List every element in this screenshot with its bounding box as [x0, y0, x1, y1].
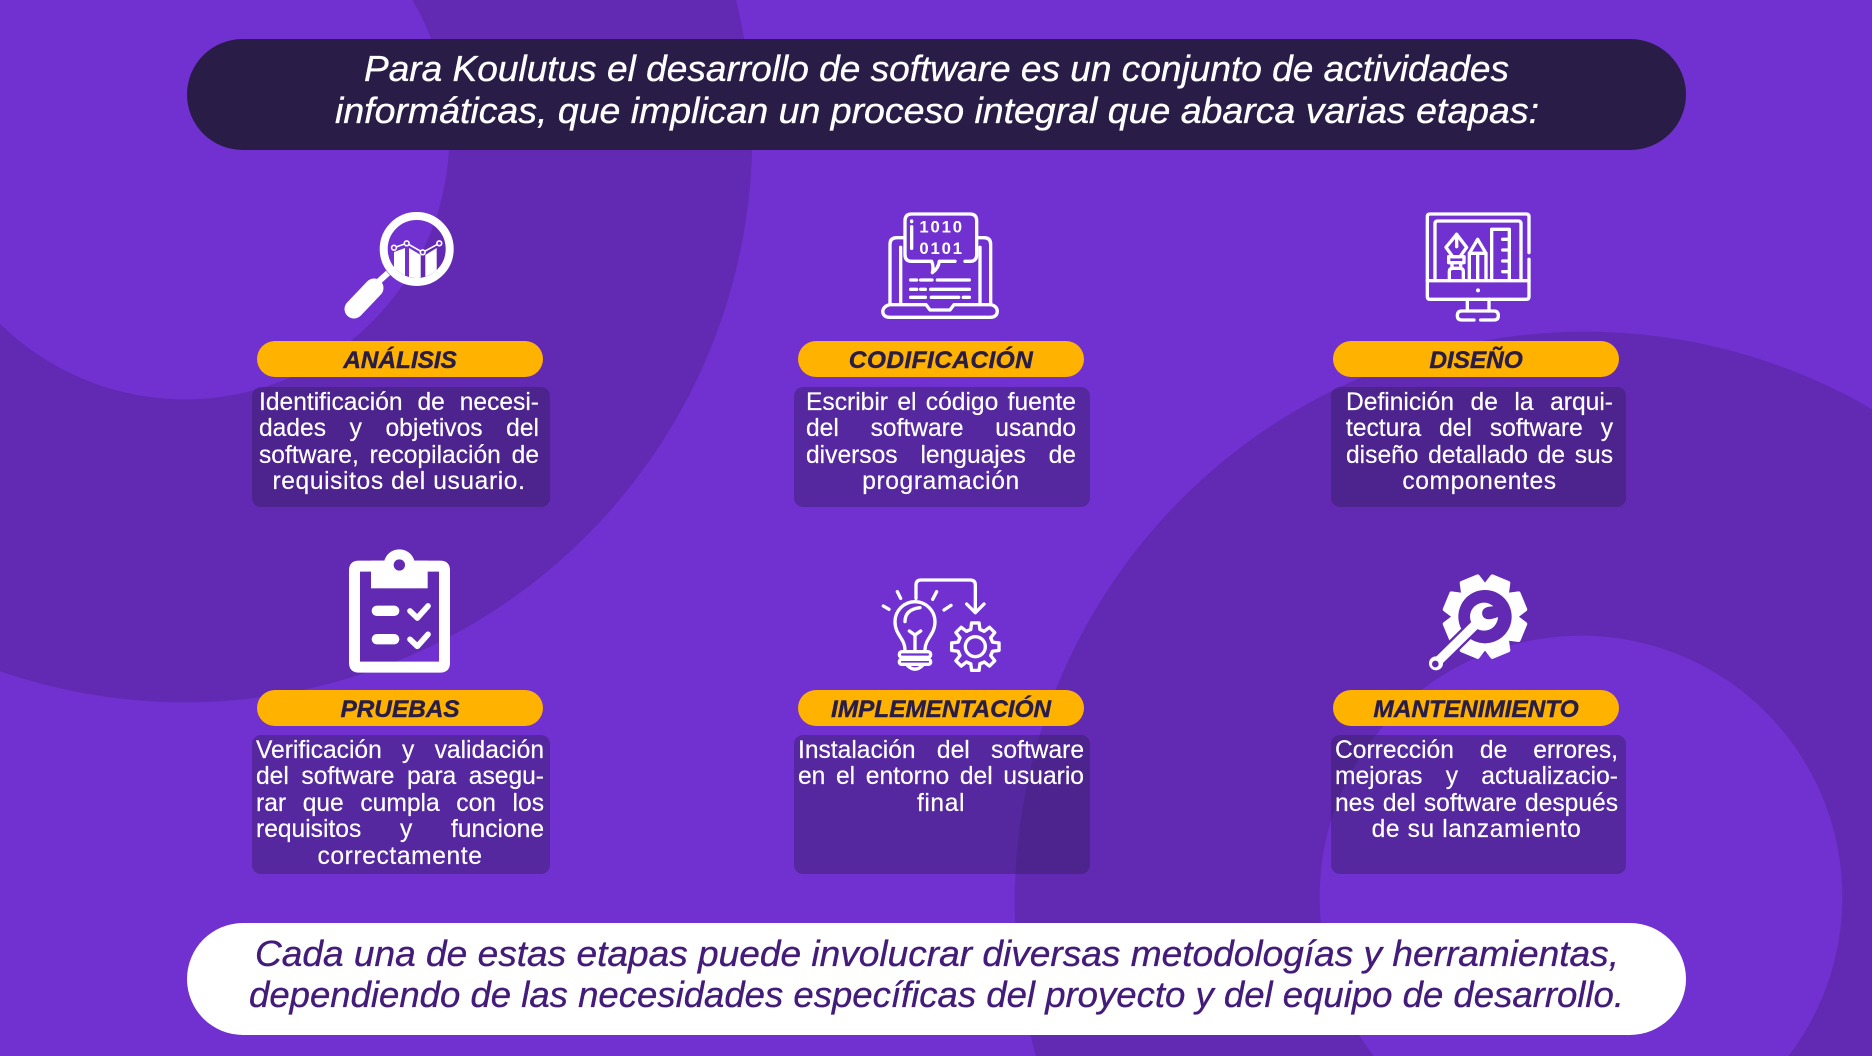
heading: Mantenimiento [1333, 690, 1619, 726]
card: Mantenimiento [1331, 690, 1626, 874]
text: Codificación [794, 387, 1090, 507]
text: Pruebas: requisitos y funcione [256, 816, 544, 843]
text: Diseño [1331, 387, 1626, 507]
text: Pruebas [252, 735, 550, 874]
heading: Análisis [257, 341, 543, 377]
icon: clipboard checklist [349, 549, 450, 673]
icon: laptop with binary code: 0101 [919, 239, 962, 258]
heading: Diseño [1333, 341, 1619, 377]
text: Pruebas: Verificación y validación [256, 737, 544, 764]
text: Mantenimiento: mejoras y actualizacio- [1335, 763, 1618, 790]
text: Análisis: dades y objetivos del [259, 415, 539, 442]
icon: magnifying glass with chart [344, 212, 454, 318]
text: Diseño: diseño detallado de sus [1346, 442, 1613, 469]
text: Implementación: final [917, 790, 965, 817]
text: Implementación: en el entorno del usuario [798, 763, 1084, 790]
icon: monitor with design tools [1426, 212, 1531, 322]
text: Diseño: Definición de la arqui- [1346, 389, 1613, 416]
text: Pruebas: del software para asegu- [256, 763, 544, 790]
heading: Pruebas [257, 690, 543, 726]
card: Codificación [794, 341, 1090, 507]
header banner: informáticas, que implican un proceso integral que abarca varias etapas: [335, 90, 1539, 131]
text: Análisis: Identificación de necesi- [259, 389, 539, 416]
text: Codificación: Escribir el código fuente [806, 389, 1076, 416]
icon: gear and wrench [1429, 574, 1528, 670]
header banner: Para Koulutus el desarrollo de software es un conjunto de actividades [364, 48, 1509, 89]
text: Mantenimiento: de su lanzamiento [1372, 816, 1581, 843]
text: Implementación [794, 735, 1090, 874]
heading: Codificación: CODIFICACIÓN [849, 347, 1033, 374]
text: Mantenimiento: Corrección de errores, [1335, 737, 1618, 764]
text: Mantenimiento: nes del software después [1335, 790, 1618, 817]
footer banner [187, 923, 1686, 1035]
heading: Diseño: DISEÑO [1429, 347, 1523, 374]
card: Diseño [1331, 341, 1626, 507]
text: Análisis [252, 387, 550, 507]
text: Codificación: diversos lenguajes de [806, 442, 1076, 469]
heading: Mantenimiento: MANTENIMIENTO [1373, 696, 1579, 723]
footer banner: dependiendo de las necesidades específicas del proyecto y del equipo de desarrollo. [249, 974, 1624, 1015]
text: Análisis: requisitos del usuario. [272, 468, 526, 495]
card: Análisis [252, 341, 550, 507]
text: Diseño: componentes [1402, 468, 1557, 495]
heading: Análisis: ANÁLISIS [343, 347, 457, 374]
text: Codificación: programación [862, 468, 1020, 495]
text: Codificación: del software usando [806, 415, 1076, 442]
card: Pruebas [252, 690, 550, 874]
text: Diseño: tectura del software y [1346, 415, 1613, 442]
heading: Pruebas: PRUEBAS [340, 696, 460, 723]
footer banner: Cada una de estas etapas puede involucrar diversas metodologías y herramientas, [255, 933, 1619, 974]
heading: Implementación [798, 690, 1084, 726]
text: Análisis: software, recopilación de [259, 442, 539, 469]
card: Implementación [794, 690, 1090, 874]
heading: Implementación: IMPLEMENTACIÓN [831, 696, 1051, 723]
text: Mantenimiento [1331, 735, 1626, 874]
icon: light bulb, arrow and gear [882, 578, 1001, 672]
heading: Codificación [798, 341, 1084, 377]
icon: laptop with binary code: 1010 [919, 217, 962, 236]
text: Implementación: Instalación del software [798, 737, 1084, 764]
text: Pruebas: rar que cumpla con los [256, 790, 544, 817]
text: Pruebas: correctamente [318, 843, 482, 870]
icon: laptop with binary code [881, 212, 999, 319]
header banner [187, 39, 1686, 150]
